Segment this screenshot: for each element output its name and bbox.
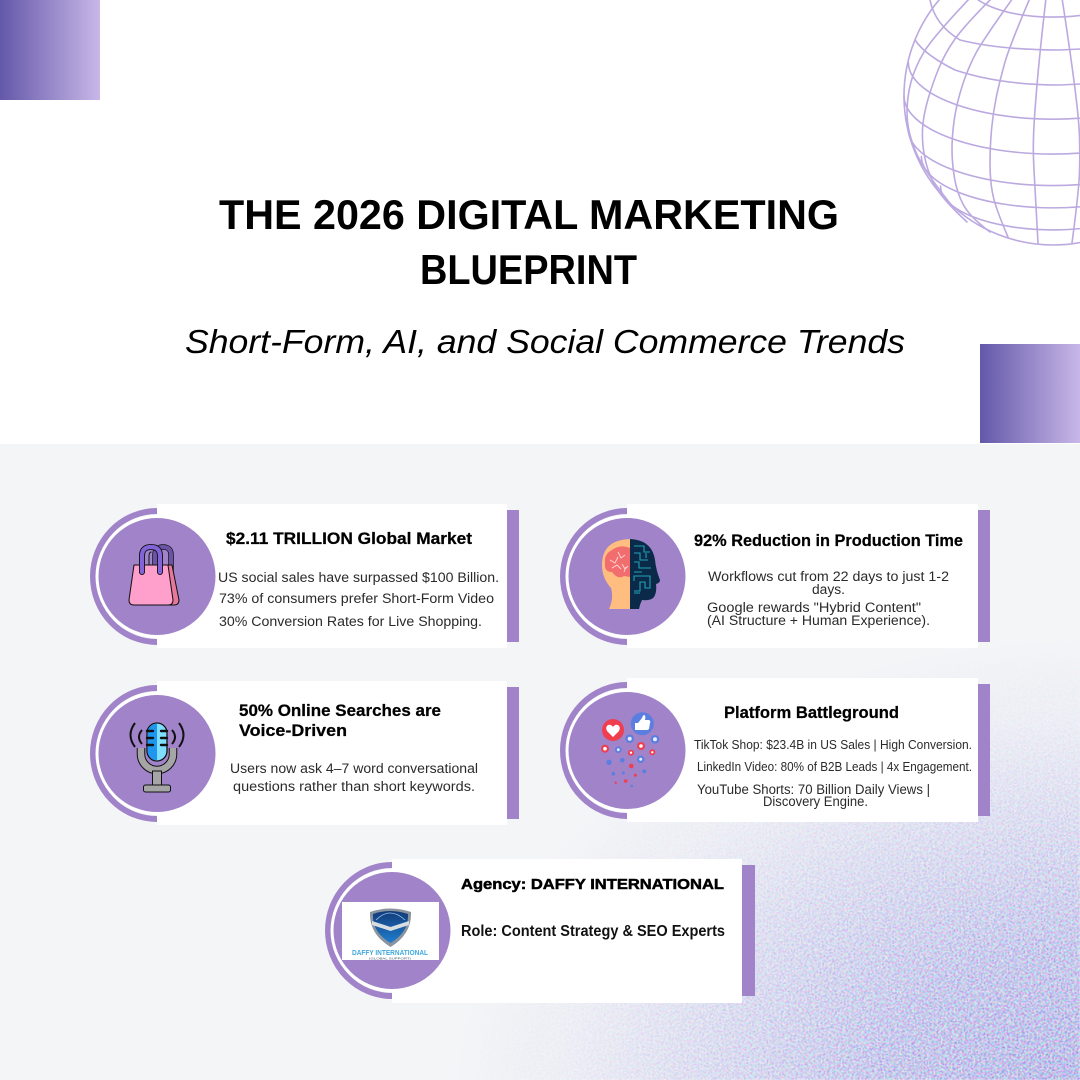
body text: Users now ask 4–7 word conversational bbox=[230, 761, 478, 776]
logo: Daffy International shield: (GLOBAL SUPPORT) bbox=[369, 956, 411, 960]
body text: Google rewards "Hybrid Content" bbox=[707, 600, 921, 615]
title: THE 2026 DIGITAL MARKETING bbox=[219, 191, 839, 238]
heading bbox=[239, 701, 441, 740]
heading: Platform Battleground bbox=[724, 703, 899, 722]
logo: Daffy International shield: DAFFY INTERNATIONAL bbox=[352, 948, 428, 957]
body text: Workflows cut from 22 days to just 1-2 bbox=[708, 569, 949, 584]
logo: Daffy International shield bbox=[342, 902, 439, 960]
heading: $2.11 TRILLION Global Market bbox=[226, 529, 472, 548]
heading: 50% Online Searches are bbox=[239, 701, 441, 720]
decorative square: top left bbox=[0, 0, 100, 100]
text: role: Role: Content Strategy & SEO Experts bbox=[461, 923, 725, 940]
body text: questions rather than short keywords. bbox=[233, 779, 475, 794]
body text: 73% of consumers prefer Short-Form Video bbox=[219, 591, 494, 606]
heading: Voice-Driven bbox=[239, 721, 347, 740]
title bbox=[219, 191, 839, 293]
wireframe globe, top right bbox=[904, 0, 1080, 245]
lower light grey section bbox=[0, 444, 1080, 1080]
body text bbox=[694, 738, 972, 809]
title: BLUEPRINT bbox=[420, 246, 637, 293]
body text: days. bbox=[812, 582, 845, 597]
body text: YouTube Shorts: 70 Billion Daily Views | bbox=[697, 782, 930, 797]
body text: (AI Structure + Human Experience). bbox=[707, 613, 930, 628]
panel: agency bbox=[328, 859, 755, 1003]
body text bbox=[218, 570, 499, 629]
body text: US social sales have surpassed $100 Billion. bbox=[218, 570, 499, 585]
heading: agency name: Agency: DAFFY INTERNATIONAL bbox=[461, 876, 724, 893]
grainy iridescent gradient, bottom right bbox=[507, 678, 1080, 1080]
icon: half brain half circuit head bbox=[602, 539, 660, 609]
subtitle: Short-Form, AI, and Social Commerce Trends bbox=[185, 323, 905, 360]
icon: likes and hearts reactions bbox=[601, 712, 659, 787]
panel: global market bbox=[93, 504, 519, 648]
icon: shopping bags bbox=[129, 547, 179, 605]
page background: white header area bbox=[0, 0, 1080, 444]
body text bbox=[230, 761, 478, 794]
body text bbox=[707, 569, 949, 628]
panel: voice search bbox=[93, 681, 519, 825]
icon: microphone bbox=[130, 723, 184, 792]
panel: platform battleground bbox=[563, 678, 990, 822]
body text: TikTok Shop: $23.4B in US Sales | High Conversion. bbox=[694, 738, 972, 752]
body text: 30% Conversion Rates for Live Shopping. bbox=[219, 614, 482, 629]
panel: production time bbox=[563, 504, 990, 648]
body text: LinkedIn Video: 80% of B2B Leads | 4x Engagement. bbox=[697, 760, 972, 774]
body text: Discovery Engine. bbox=[763, 794, 868, 809]
heading: 92% Reduction in Production Time bbox=[694, 531, 963, 550]
decorative square: right bbox=[980, 344, 1080, 443]
